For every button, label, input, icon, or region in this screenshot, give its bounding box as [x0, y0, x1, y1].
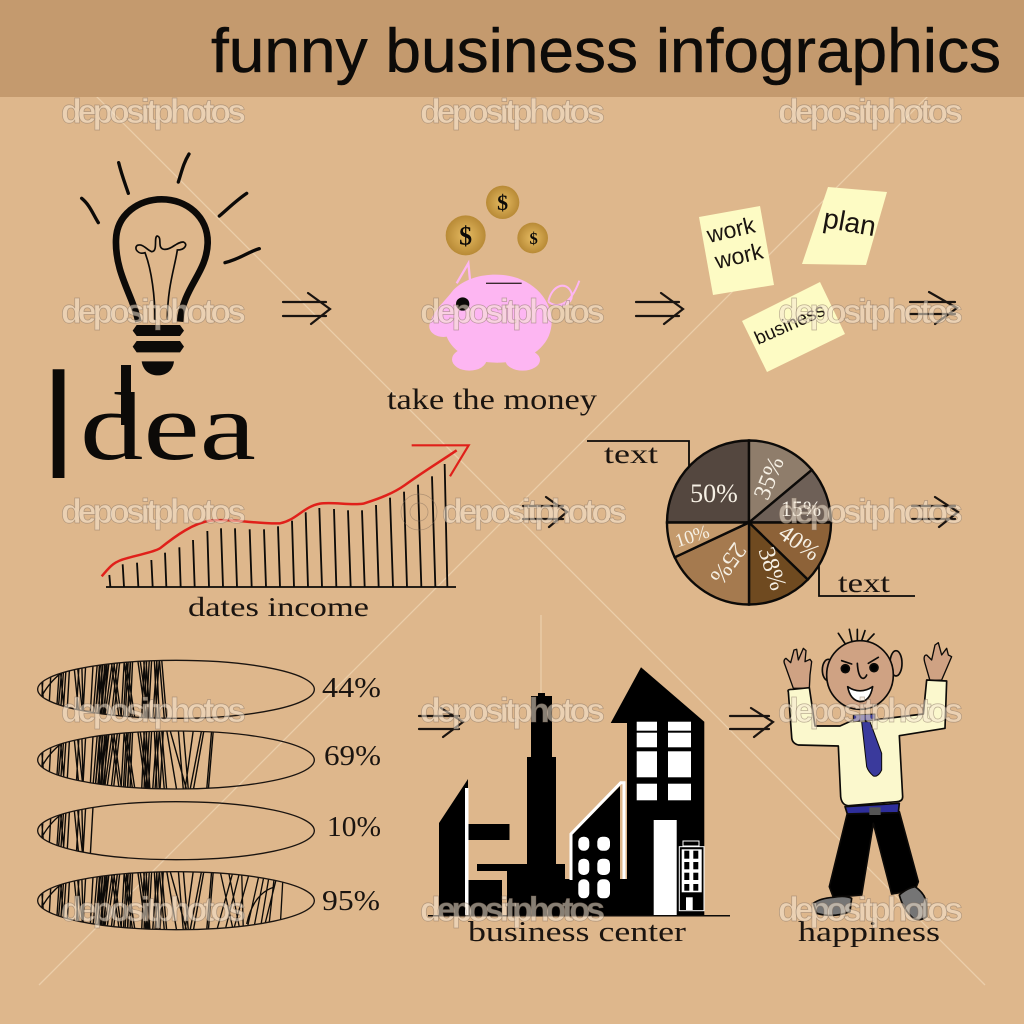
left wedge building [439, 779, 510, 915]
arrow 2 [636, 293, 683, 324]
pig body [429, 263, 579, 371]
watermarks: depositphotos [61, 891, 246, 929]
pie percentage labels: 35% [749, 453, 790, 504]
shirt [788, 680, 947, 806]
watermarks: depositphotos [442, 493, 627, 531]
percentage labels [322, 673, 381, 917]
note: business: business [751, 300, 829, 350]
watermarks: depositphotos [778, 293, 963, 331]
small inset building [679, 841, 704, 911]
central tower [477, 693, 575, 915]
watermarks [61, 93, 963, 929]
coins: $ [497, 190, 508, 215]
pie chart [587, 439, 915, 604]
note: work work [699, 206, 774, 295]
pie percentage labels: 15% [781, 496, 821, 521]
watermarks: depositphotos [420, 93, 605, 131]
label: dates income: dates income [188, 592, 369, 622]
label: text bottom: text [838, 568, 891, 598]
icon: piggy bank with coins [429, 186, 579, 371]
percentage labels: 95% [322, 886, 380, 917]
arrow 3 [910, 292, 957, 324]
buildings [428, 667, 730, 916]
slanted building [560, 783, 640, 915]
collar and tie [853, 714, 882, 776]
bar chart with red trend arrow [102, 445, 469, 587]
arrow 1 [283, 293, 330, 324]
header band with title [0, 0, 1024, 97]
happy businessman [784, 629, 952, 920]
arrow 7 [730, 708, 773, 737]
watermarks: depositphotos [778, 493, 963, 531]
watermarks: depositphotos [420, 891, 605, 929]
ellipse 10% [38, 801, 314, 861]
tall arrow-roof building [611, 667, 704, 915]
pie percentage labels: 25% [704, 538, 751, 588]
ellipse 69% [38, 730, 314, 790]
shoes [813, 887, 927, 920]
leader lines [587, 441, 915, 596]
percentage labels: 69% [324, 741, 381, 772]
percentage labels: 44% [322, 673, 381, 704]
note: work work: work [711, 238, 766, 274]
watermarks: depositphotos [778, 93, 963, 131]
arrow 4 [523, 497, 567, 527]
legs [829, 812, 918, 897]
watermarks: depositphotos [420, 692, 605, 730]
label: business center: business center [468, 917, 687, 948]
ground line [428, 915, 730, 917]
watermarks: depositphotos [778, 692, 963, 730]
note: business [742, 282, 845, 372]
note: plan: plan [821, 202, 878, 242]
pie percentage labels: 50% [690, 479, 738, 508]
head [822, 629, 902, 709]
progress ellipses [38, 659, 314, 931]
pie percentage labels: 10% [672, 521, 712, 552]
watermarks: depositphotos [61, 293, 246, 331]
belt [845, 803, 899, 815]
label: happiness: happiness [798, 917, 940, 948]
label: text top: text [604, 439, 659, 469]
hands [784, 643, 952, 688]
pie percentage labels: 40% [774, 520, 824, 567]
heading: Idea: I [41, 336, 76, 512]
note: work work: work [703, 212, 758, 248]
coins: $ [530, 229, 538, 248]
label: take the money: take the money [387, 383, 597, 416]
coins [446, 186, 548, 255]
note: plan [802, 187, 887, 265]
watermarks: depositphotos [61, 93, 246, 131]
heading: Idea: dea [80, 374, 256, 480]
watermarks: depositphotos [61, 493, 246, 531]
arrow 5 [912, 497, 958, 527]
pie slices [667, 440, 831, 604]
icon: light bulb [82, 154, 259, 375]
watermarks: depositphotos [61, 692, 246, 730]
arrow 6 [419, 708, 463, 737]
ellipse 95% [38, 871, 314, 931]
title: funny business infographics [211, 17, 1001, 86]
ellipse 44% [38, 659, 314, 719]
heading: Idea [41, 336, 256, 512]
pie percentage labels [672, 453, 824, 594]
coins: $ [459, 222, 472, 251]
pie percentage labels: 38% [752, 544, 791, 594]
percentage labels: 10% [327, 812, 381, 843]
watermarks: depositphotos [778, 891, 963, 929]
watermarks: depositphotos [420, 293, 605, 331]
sticky notes [699, 187, 887, 372]
